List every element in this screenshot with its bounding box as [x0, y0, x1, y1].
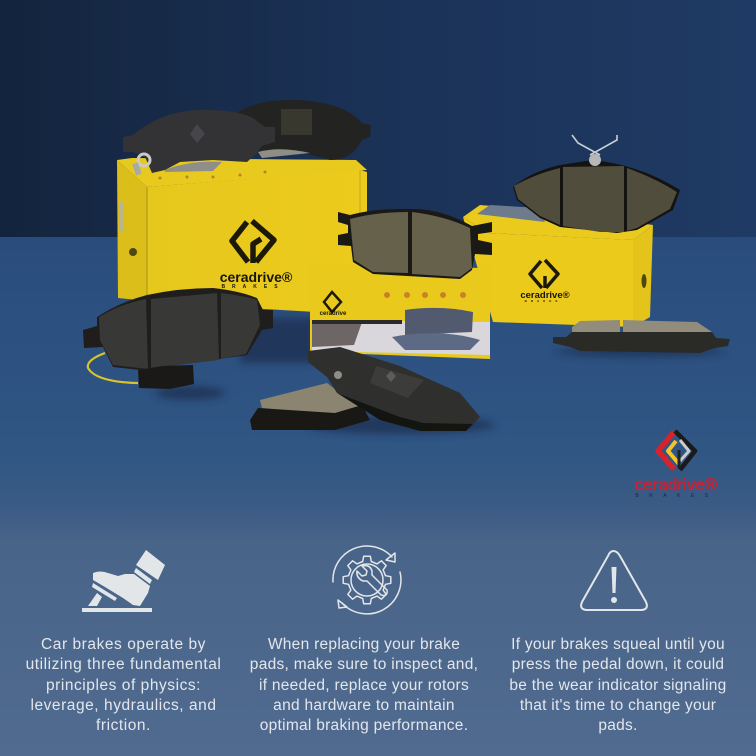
text: wear indicator: be the wear indicator signaling: [509, 677, 727, 694]
text: braking physics: utilizing three fundamental: [26, 656, 221, 673]
box brand name: ceradrive®: [520, 290, 570, 301]
back dark brake pad: [238, 100, 371, 160]
text: wear indicator: If your brakes squeal until you: [511, 636, 725, 653]
right flat brake pad: [553, 320, 730, 353]
sensor connector: [138, 365, 194, 389]
text: braking physics: leverage, hydraulics, and: [30, 697, 217, 714]
text: wear indicator: pads.: [598, 717, 638, 734]
large yellow box: [117, 158, 367, 315]
background wall: [0, 0, 756, 238]
box logo: [530, 260, 558, 288]
logo mark: [658, 431, 695, 470]
middle friction pad: [338, 209, 492, 279]
icon: gear and wrench service: [333, 546, 401, 614]
small yellow box: [310, 262, 490, 359]
large yellow box: BRAKES: [221, 284, 285, 290]
front backing plate pad: [308, 347, 480, 431]
sensor wire: [88, 353, 138, 383]
text: replacing pads: if needed, replace your rotors: [259, 677, 469, 694]
stacked pad underneath: [250, 383, 370, 430]
text: braking physics: principles of physics:: [46, 677, 201, 694]
background floor and information band: [0, 237, 756, 756]
front dark brake pad on big box: [123, 110, 275, 176]
contact shadows: [155, 318, 725, 434]
text: wear indicator: that it's time to change your: [520, 697, 716, 714]
right yellow box: BRAKES: [525, 299, 561, 303]
small box brand name: ceradrive: [320, 311, 347, 317]
text: replacing pads: optimal braking performance.: [260, 717, 468, 734]
icon: foot on brake pedal: [82, 550, 165, 612]
box logo: [232, 221, 274, 263]
text: replacing pads: and hardware to maintain: [273, 697, 455, 714]
left front brake pad with sensor: [83, 288, 273, 389]
text: replacing pads: pads, make sure to inspect and,: [250, 656, 478, 673]
text: braking physics: Car brakes operate by: [41, 636, 206, 653]
text: braking physics: friction.: [96, 717, 151, 734]
text: wear indicator: press the pedal down, it could: [512, 656, 724, 673]
icon: warning triangle: [581, 551, 647, 610]
wear indicator clip: [572, 135, 617, 155]
brand logo: [635, 431, 719, 499]
right yellow box: [463, 205, 653, 327]
small box logo: [324, 292, 341, 312]
top right friction pad: [513, 135, 680, 233]
text: replacing pads: When replacing your brake: [268, 636, 460, 653]
box brand name: ceradrive®: [220, 269, 293, 285]
logo subtitle: BRAKES: [635, 493, 719, 499]
logo wordmark: ceradrive®: [635, 475, 718, 494]
